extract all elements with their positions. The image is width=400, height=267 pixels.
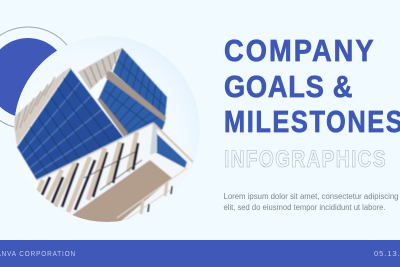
body paragraph <box>224 192 398 212</box>
title <box>224 34 400 140</box>
title: COMPANY <box>224 34 374 68</box>
lower terrace with slats <box>37 123 193 226</box>
left tower <box>13 68 123 182</box>
blue circle <box>0 38 68 118</box>
body paragraph: Lorem ipsum dolor sit amet, consectetur adipiscing <box>224 192 398 201</box>
back tower <box>78 48 167 137</box>
title: MILESTONES <box>224 105 400 140</box>
decorative ring <box>0 27 79 129</box>
subtitle outlined: INFOGRAPHICS <box>224 145 386 173</box>
photo: office building in circle <box>13 36 200 226</box>
footer bar <box>0 240 400 267</box>
body paragraph: elit, sed do eiusmod tempor incididunt ut labore. <box>224 203 386 212</box>
title: GOALS & <box>224 70 352 104</box>
